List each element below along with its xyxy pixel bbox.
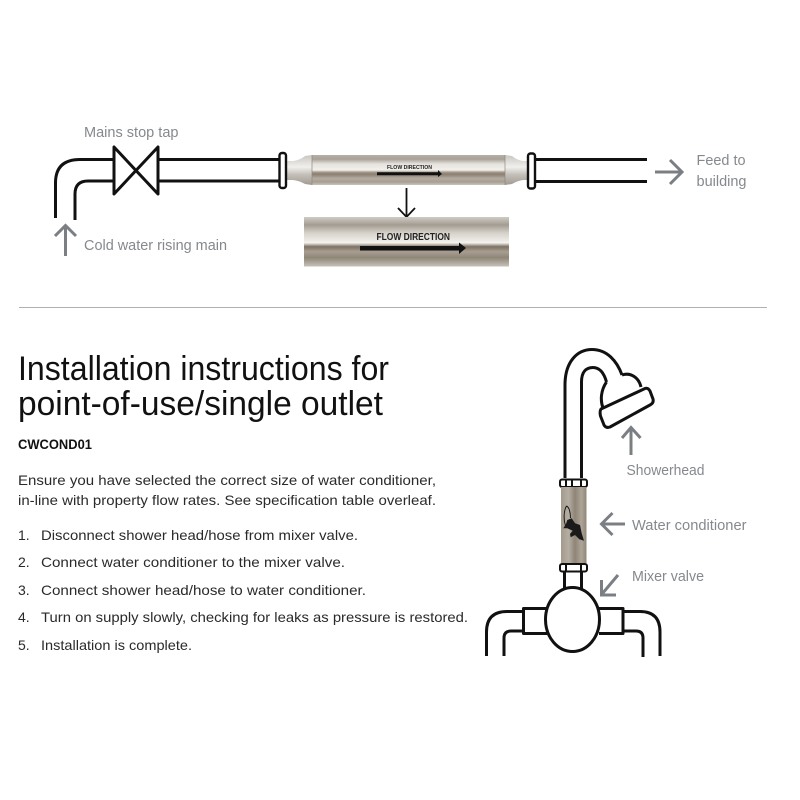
arrow: showerhead (622, 428, 640, 455)
product code: CWCOND01 (18, 437, 92, 452)
arrow: water conditioner (602, 513, 625, 535)
label: feed to building: Feed to (696, 152, 746, 169)
water conditioner (286, 155, 528, 185)
right flange (528, 154, 535, 188)
step 2: Connect water conditioner to the mixer valve. (41, 554, 345, 570)
lower nut (560, 564, 587, 572)
in-line water conditioner (561, 487, 586, 563)
label: water conditioner: Water conditioner (632, 517, 747, 534)
heading line 1: Installation instructions for (18, 350, 389, 388)
intro line 2: in-line with property flow rates. See specification table overleaf. (18, 492, 436, 508)
step 3: 3. (18, 582, 30, 598)
stop tap valve (114, 147, 158, 194)
step 3: Connect shower head/hose to water conditioner. (41, 582, 366, 598)
shower riser pipe (565, 350, 622, 478)
label: building: building (696, 173, 746, 190)
left supply pipe (486, 612, 523, 656)
upper nut (560, 480, 587, 487)
step 4: 4. (18, 609, 30, 625)
label: showerhead: Showerhead (626, 462, 704, 479)
arrow: mixer valve (602, 575, 618, 595)
step 1: 1. (18, 527, 30, 543)
valve right connector (599, 608, 623, 634)
small flow label: FLOW DIRECTION (387, 165, 432, 171)
diagram: mains installation (55, 124, 746, 266)
step 1: Disconnect shower head/hose from mixer valve. (41, 527, 358, 543)
large flow label: FLOW DIRECTION (376, 232, 450, 243)
magnified conditioner (304, 217, 509, 266)
divider (19, 306, 767, 308)
arrow: rising main (55, 226, 76, 256)
valve body (546, 588, 600, 652)
step 5: Installation is complete. (41, 637, 192, 653)
arrow: feed to building (655, 160, 682, 184)
step 2: 2. (18, 554, 30, 570)
valve left connector (524, 608, 547, 634)
large flow arrow (360, 242, 466, 254)
zoom arrow (398, 188, 415, 217)
small flow arrow (377, 170, 442, 177)
text block: instructions (18, 350, 468, 653)
step 4: Turn on supply slowly, checking for leaks as pressure is restored. (41, 609, 468, 625)
shower head (600, 374, 653, 427)
pipe to conditioner (159, 160, 279, 181)
label: mixer valve: Mixer valve (632, 568, 704, 585)
label: mains stop tap: Mains stop tap (84, 124, 178, 141)
icon: lizard logo (563, 506, 584, 541)
valve neck (564, 572, 582, 589)
diagram: shower point of use (486, 350, 747, 657)
rising main pipe (56, 160, 113, 220)
outlet pipe (535, 160, 647, 182)
right supply pipe (623, 612, 660, 657)
label: cold water rising main: Cold water rising main (84, 237, 227, 254)
intro line 1: Ensure you have selected the correct size of water conditioner, (18, 472, 436, 488)
left flange (280, 153, 286, 188)
heading line 2: point-of-use/single outlet (18, 385, 384, 423)
step 5: 5. (18, 637, 30, 653)
